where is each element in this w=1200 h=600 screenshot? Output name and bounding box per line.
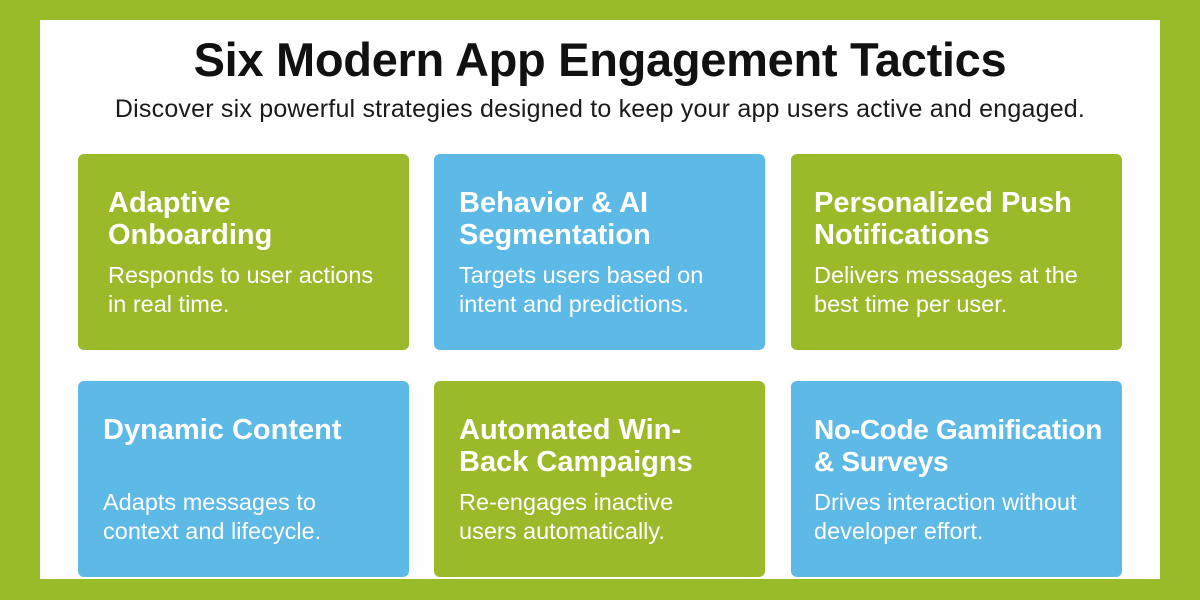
card: gamification: No-Code Gamification: [814, 414, 1102, 445]
card: dynamic content: context and lifecycle.: [103, 518, 321, 544]
card: behavior segmentation: intent and predictions.: [459, 291, 689, 317]
title: Six Modern App Engagement Tactics: [194, 33, 1006, 86]
card: gamification: developer effort.: [814, 518, 983, 544]
card: adaptive onboarding: Onboarding: [108, 219, 272, 251]
card: win-back: Automated Win-: [459, 414, 681, 446]
subtitle: Discover six powerful strategies designed to keep your app users active and engaged.: [115, 95, 1085, 123]
card: adaptive onboarding: in real time.: [108, 291, 229, 317]
card: push notifications: [791, 154, 1122, 350]
card: win-back: Re-engages inactive: [459, 489, 673, 515]
card: dynamic content: Adapts messages to: [103, 489, 316, 515]
card: gamification: [791, 381, 1122, 577]
card: adaptive onboarding: [78, 154, 409, 350]
card: behavior segmentation: [434, 154, 765, 350]
card: push notifications: Delivers messages at the: [814, 262, 1078, 288]
card: adaptive onboarding: Adaptive: [108, 187, 230, 219]
card: dynamic content: [78, 381, 409, 577]
card: behavior segmentation: Behavior & AI: [459, 187, 648, 219]
card: win-back: [434, 381, 765, 577]
card: dynamic content: Dynamic Content: [103, 414, 341, 446]
card: behavior segmentation: Segmentation: [459, 219, 651, 251]
card: gamification: Drives interaction without: [814, 489, 1077, 515]
card: gamification: & Surveys: [814, 446, 948, 477]
card: push notifications: Notifications: [814, 219, 990, 251]
card: adaptive onboarding: Responds to user actions: [108, 262, 373, 288]
card: behavior segmentation: Targets users based on: [459, 262, 703, 288]
card: push notifications: best time per user.: [814, 291, 1007, 317]
card: win-back: Back Campaigns: [459, 446, 693, 478]
card: push notifications: Personalized Push: [814, 187, 1072, 219]
card: win-back: users automatically.: [459, 518, 665, 544]
